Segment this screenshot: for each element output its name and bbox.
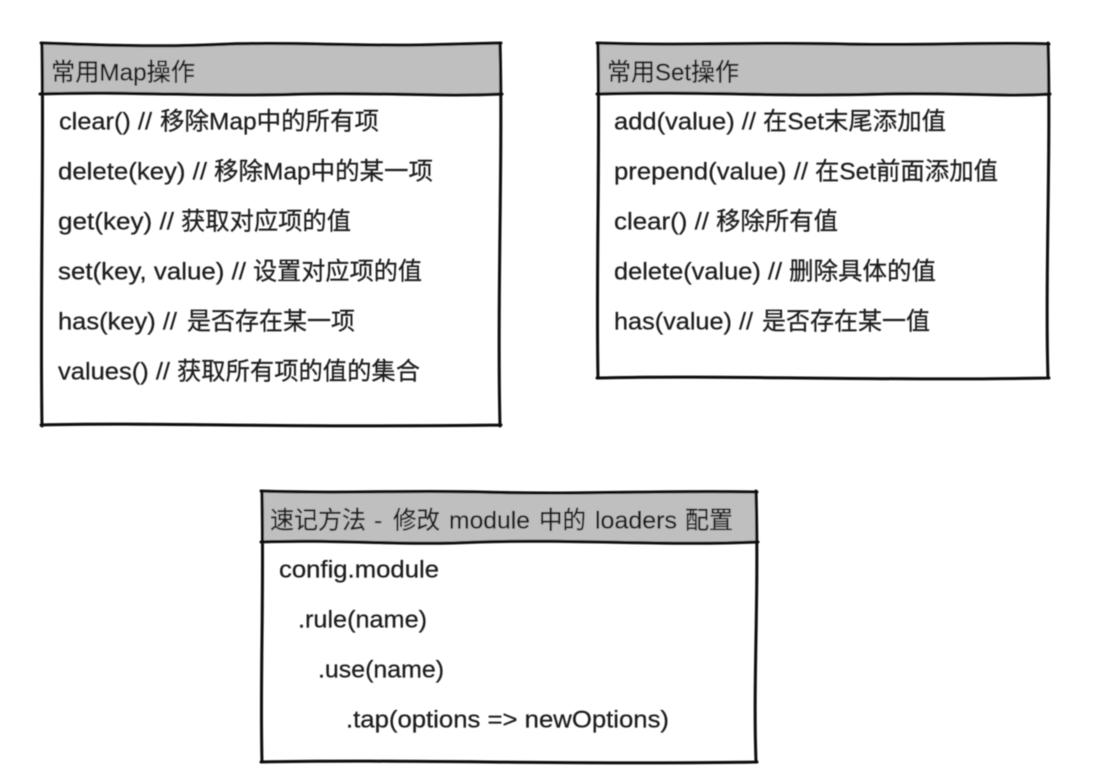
header: Set panel background [598, 44, 1048, 94]
item: clear: clear() // [614, 208, 709, 236]
code line: config.module: config.module [279, 556, 439, 584]
item: get: get(key) // [58, 208, 174, 236]
code line: use: .use(name) [318, 656, 444, 684]
code line: tap: .tap(options => newOptions) [346, 706, 669, 734]
item: set: set(key, value) // [58, 258, 246, 286]
item: get: 获取对应项的值 [181, 208, 351, 236]
item: delete: delete(value) // [614, 258, 782, 286]
item: has: has(key) // [58, 308, 177, 336]
panel: common Set operations [597, 43, 1050, 379]
item: delete: delete(key) // [58, 158, 207, 186]
panel outline: Set [597, 43, 1050, 379]
item: add: 在Set末尾添加值 [763, 108, 946, 136]
panel: loaders shorthand [261, 491, 758, 763]
item: prepend: prepend(value) // [614, 158, 808, 186]
panel outline: Map [40, 43, 502, 426]
header: shorthand panel background [262, 492, 756, 542]
heading: shorthand: 中的 [539, 506, 586, 534]
item: prepend: 在Set前面添加值 [815, 158, 998, 186]
item: clear: clear() // [59, 108, 152, 136]
item: has: 是否存在某一值 [762, 308, 930, 336]
item: delete: 移除Map中的某一项 [214, 158, 433, 186]
item: add: add(value) // [614, 108, 756, 136]
panel outline: shorthand [261, 491, 758, 763]
panel: common Map operations [40, 43, 502, 426]
heading: shorthand: 修改 [393, 506, 440, 534]
item: clear: 移除Map中的所有项 [160, 108, 379, 136]
heading: shorthand: 速记方法 [270, 506, 366, 534]
heading: Set: 常用Set操作 [607, 58, 739, 86]
heading: shorthand: module [449, 508, 530, 534]
heading: shorthand: - [374, 508, 382, 534]
item: set: 设置对应项的值 [253, 258, 422, 286]
code line: rule: .rule(name) [298, 606, 427, 634]
item: clear: 移除所有值 [716, 208, 838, 236]
heading: shorthand: loaders [595, 508, 677, 534]
item: has: has(value) // [614, 308, 753, 336]
item: has: 是否存在某一项 [187, 308, 355, 336]
item: values: values() // [58, 358, 170, 386]
item: values: 获取所有项的值的集合 [177, 358, 420, 386]
item: delete: 删除具体的值 [789, 258, 936, 286]
heading: shorthand: 配置 [685, 508, 733, 534]
header: Map panel background [42, 44, 500, 94]
heading: Map: 常用Map操作 [51, 58, 195, 86]
